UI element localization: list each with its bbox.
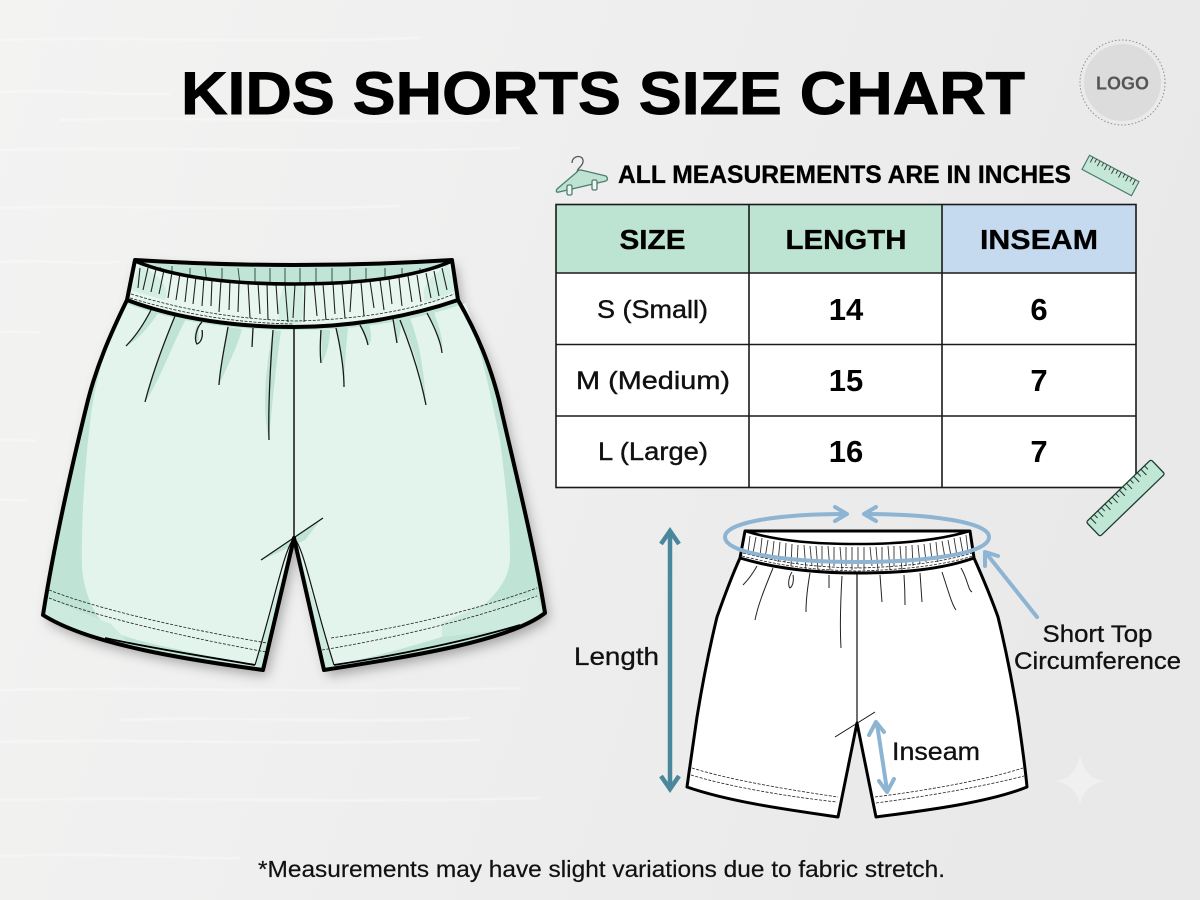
subheading: ALL MEASUREMENTS ARE IN INCHES <box>618 161 1071 189</box>
hem and leg flaps <box>45 538 543 670</box>
center seam <box>293 328 295 538</box>
row: medium: 7 <box>1030 363 1048 398</box>
label: short top circumference: Short Top <box>1042 621 1152 648</box>
arrow: circumference pointer <box>985 552 1037 617</box>
diagram folds and seam <box>743 566 972 648</box>
row: large: 16 <box>829 434 863 469</box>
row: large: L (Large) <box>598 438 708 466</box>
row: small: 6 <box>1030 292 1048 327</box>
table header row <box>556 204 1136 273</box>
decorative sparkle <box>1056 755 1104 804</box>
garment outline <box>43 260 545 670</box>
icon: ruler top <box>1082 155 1139 196</box>
diagram: measurement shorts <box>687 531 1027 817</box>
table header row: LENGTH <box>786 224 906 255</box>
icon: hanger <box>556 156 608 195</box>
crotch seam <box>255 518 334 665</box>
waistband shading <box>131 264 456 326</box>
hem stitching <box>49 588 537 652</box>
light fabric panel <box>82 303 510 665</box>
icon: ruler right <box>1086 460 1165 536</box>
arrow: inseam <box>869 722 894 792</box>
row: medium: 15 <box>829 363 863 398</box>
table header row: SIZE <box>620 224 686 255</box>
waistband band <box>127 261 458 327</box>
row: large: 7 <box>1030 434 1048 469</box>
row: medium: M (Medium) <box>576 367 730 395</box>
back waistband interior <box>135 262 452 284</box>
fold shading <box>126 308 442 440</box>
footnote: *Measurements may have slight variations due to fabric stretch. <box>258 856 945 882</box>
logo badge <box>1080 40 1165 125</box>
diagram silhouette <box>687 531 1027 817</box>
diagram outline <box>687 531 1027 817</box>
label: inseam: Inseam <box>892 738 980 766</box>
waistband gathers <box>138 268 447 322</box>
arrow: length <box>661 531 679 789</box>
size table <box>556 204 1136 488</box>
diagram waistband gathers <box>748 535 968 570</box>
shorts silhouette with shadow <box>43 260 545 670</box>
label: length: Length <box>574 643 659 671</box>
title: KIDS SHORTS SIZE CHART <box>181 60 1025 127</box>
label: short top circumference <box>1014 621 1181 675</box>
diagram hem stitching <box>691 768 1024 803</box>
row: small: S (Small) <box>597 296 708 324</box>
illustration: mint shorts <box>43 260 545 670</box>
diagram waistband stitching <box>742 553 973 571</box>
label: short top circumference: Circumference <box>1014 648 1181 675</box>
table body <box>556 273 1136 488</box>
arrow: waist circumference <box>725 507 989 562</box>
fold lines <box>126 308 442 440</box>
table header row: INSEAM <box>980 224 1098 255</box>
row: small <box>597 292 1048 327</box>
logo badge: LOGO <box>1096 74 1149 94</box>
waistband stitching <box>130 294 454 324</box>
row: small: 14 <box>829 292 864 327</box>
row: medium <box>576 363 1048 398</box>
row: large <box>598 434 1048 469</box>
